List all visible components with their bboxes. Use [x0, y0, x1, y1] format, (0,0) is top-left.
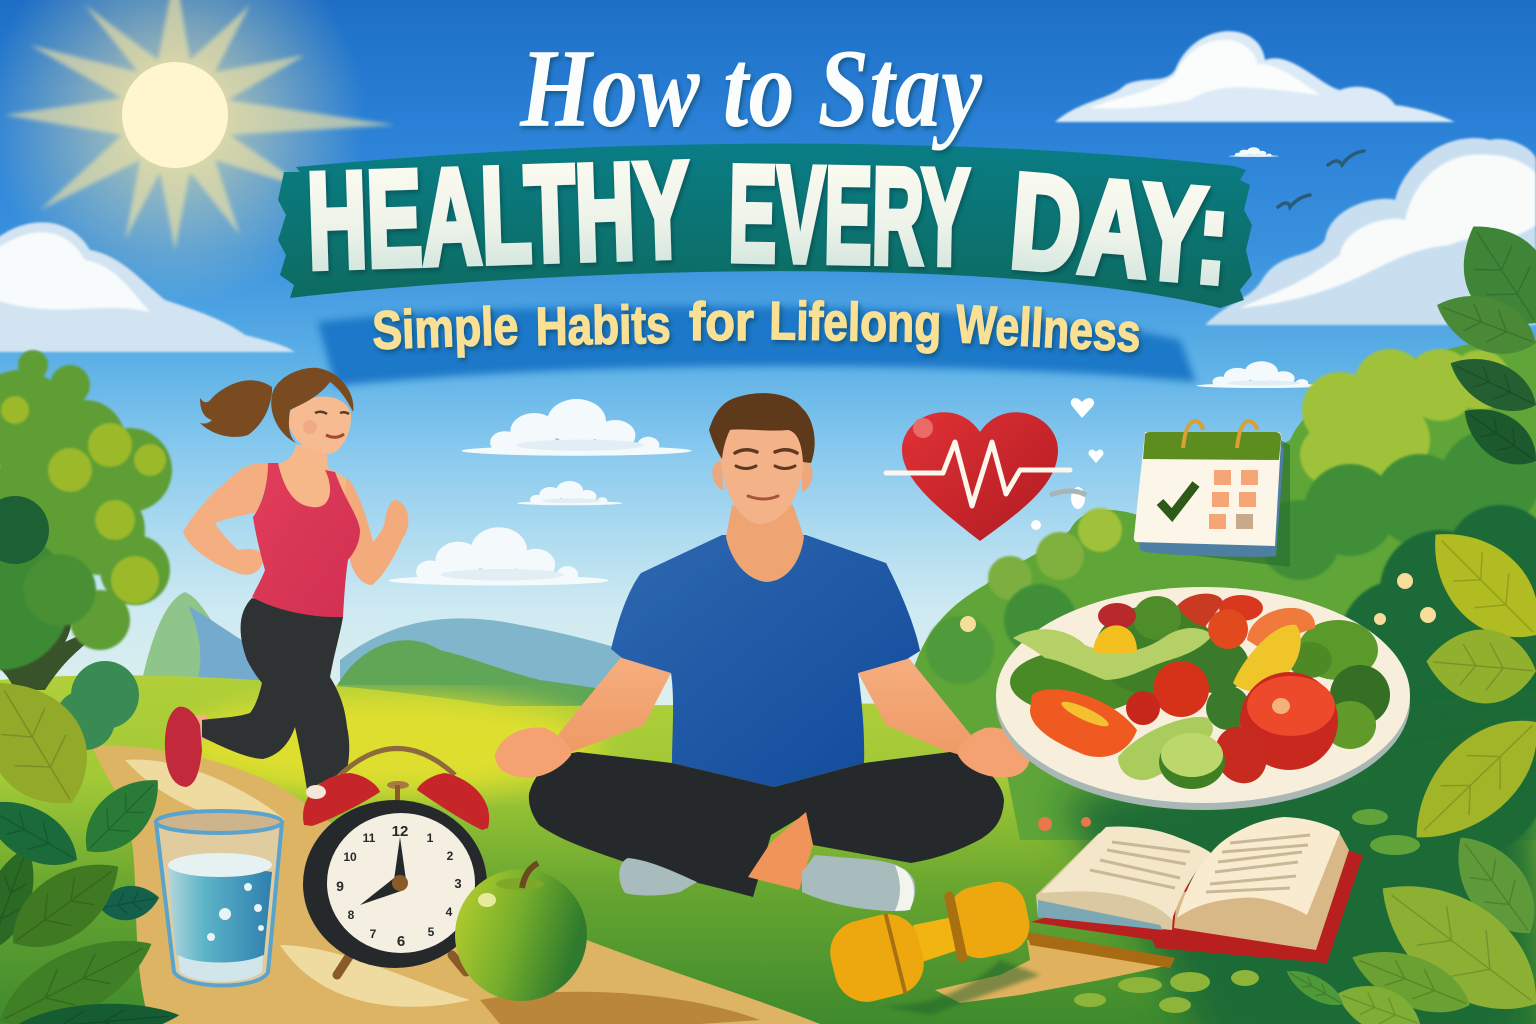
cloud: small mid [517, 481, 622, 505]
big tomato [1240, 672, 1338, 770]
title line one: How to Stay [519, 27, 983, 151]
head [288, 396, 351, 454]
clock numbers: 7 [370, 927, 377, 941]
subtitle banner stroke [318, 306, 1196, 386]
title line two [305, 133, 1235, 312]
hands [495, 727, 571, 778]
clock numbers: 4 [446, 905, 453, 919]
cloud: small near the title [462, 399, 692, 456]
tomato wedge [1206, 718, 1276, 792]
left shoe [619, 858, 697, 896]
clock bells [303, 773, 380, 826]
clock numbers: 12 [392, 823, 408, 840]
subtitle: Lifelong [769, 291, 942, 354]
cloud: tiny [1229, 147, 1279, 157]
greens [1010, 596, 1390, 749]
subtitle: for [689, 292, 754, 352]
clock numbers: 5 [428, 925, 435, 939]
heart with pulse line [886, 398, 1103, 541]
right bushes [905, 340, 1536, 860]
clock numbers: 2 [447, 849, 454, 863]
tomatoes and peppers [1093, 594, 1315, 691]
title line two: EVERY [727, 137, 970, 293]
small tomatoes [1153, 661, 1209, 717]
cucumbers [1118, 717, 1213, 780]
clock numbers [336, 823, 462, 950]
clock numbers: 11 [363, 831, 376, 845]
subtitle [371, 291, 1142, 364]
distant hills [140, 592, 625, 720]
green apple [455, 863, 587, 1001]
cloud: left [0, 222, 295, 352]
clock numbers: 8 [348, 908, 355, 922]
chest and neck [268, 445, 350, 540]
dark shade lower right [1060, 700, 1536, 1024]
alarm clock [303, 748, 489, 975]
dumbbell [823, 877, 1040, 1015]
title line two: HEALTHY [305, 133, 692, 297]
salad plate [996, 587, 1410, 810]
face features [315, 412, 349, 437]
ground patches [1074, 809, 1420, 1013]
neck [726, 505, 804, 582]
lettuce leaf [1013, 628, 1213, 680]
head [720, 425, 805, 524]
calendar [1134, 421, 1290, 567]
small flowers [960, 573, 1436, 831]
right foliage [1281, 205, 1536, 1024]
shirt [611, 535, 920, 787]
back arm [183, 463, 272, 575]
hair [709, 393, 815, 463]
cloud: right large [1205, 138, 1536, 325]
subtitle: Habits [535, 295, 671, 357]
face features [735, 450, 797, 499]
clock numbers: 3 [454, 876, 462, 891]
crossed shin [748, 812, 813, 890]
meadow [0, 675, 1536, 1024]
ears [712, 461, 813, 492]
right shoe [802, 855, 915, 911]
title line two: DAY: [1006, 146, 1235, 312]
sun [0, 0, 395, 305]
clock hands [394, 837, 406, 880]
front arm [340, 477, 408, 585]
bottom-left foliage [0, 659, 181, 1024]
clock body [303, 800, 487, 968]
runner [165, 368, 408, 790]
glass of water [156, 811, 282, 986]
dirt path [92, 745, 1175, 1024]
sky background [0, 0, 1536, 720]
sliced red pepper [1030, 689, 1137, 757]
cloud: low mid [389, 527, 609, 586]
tank top [252, 463, 360, 617]
pants [529, 752, 1004, 897]
left tree [0, 350, 172, 750]
arms [555, 656, 671, 752]
leggings [202, 598, 349, 790]
open book [1031, 817, 1363, 963]
plate [996, 594, 1410, 810]
banner and title block [278, 27, 1252, 386]
clock numbers: 10 [343, 850, 357, 864]
subtitle: Wellness [954, 294, 1142, 364]
meadow highlight [180, 695, 600, 795]
ponytail [200, 380, 272, 437]
clock numbers: 6 [397, 933, 405, 950]
clock numbers: 9 [336, 878, 344, 894]
hair [271, 368, 353, 443]
meditating man [495, 393, 1030, 911]
clock numbers: 1 [427, 831, 434, 845]
cloud: top right [1055, 31, 1455, 122]
clouds [0, 31, 1536, 586]
main title banner stroke [278, 144, 1252, 308]
ankle [183, 715, 207, 740]
cloud: small right [1196, 361, 1326, 388]
subtitle: Simple [371, 296, 519, 361]
shoe [165, 707, 202, 787]
birds [1278, 151, 1364, 207]
